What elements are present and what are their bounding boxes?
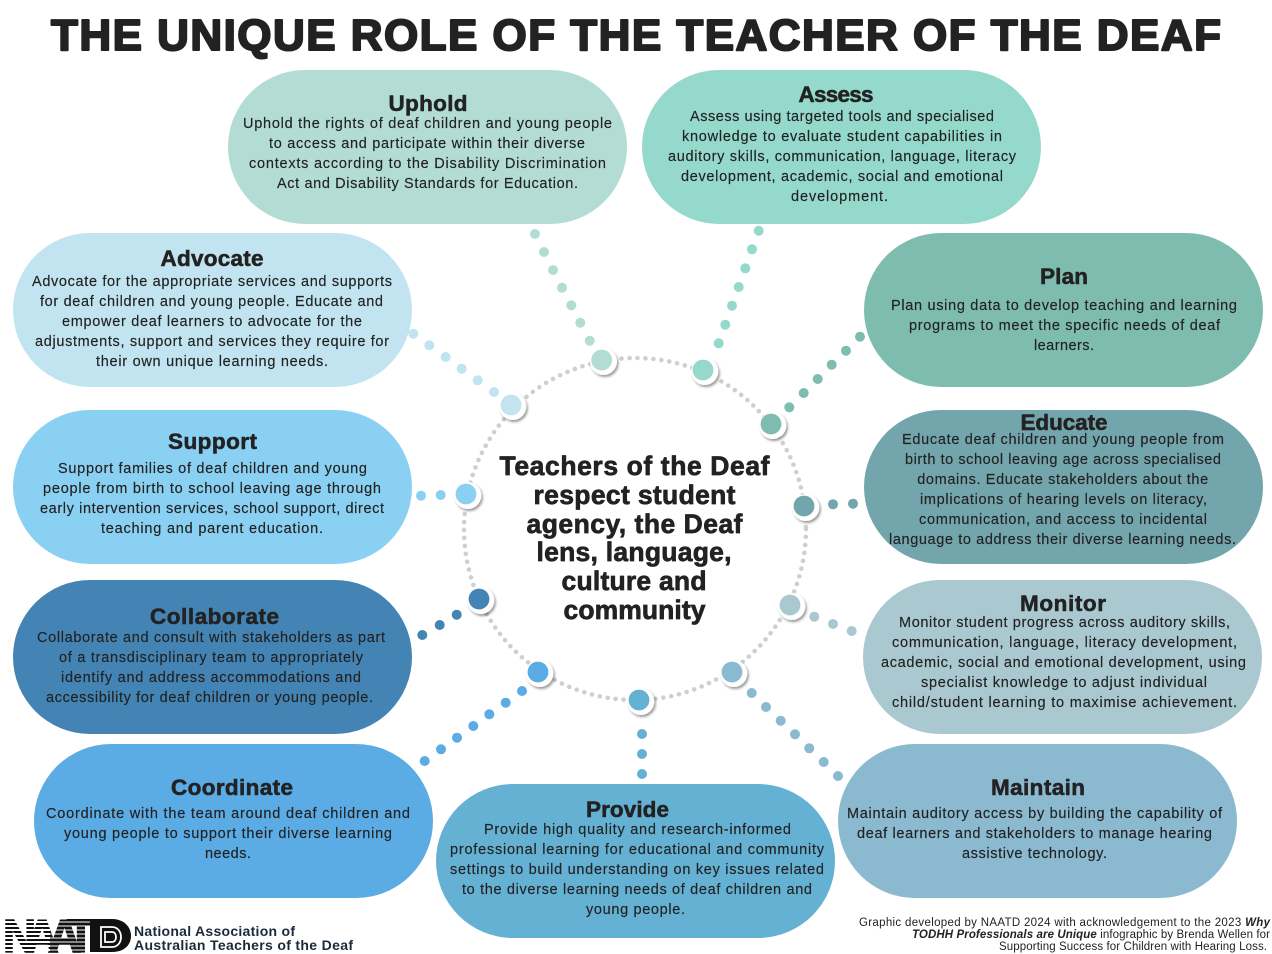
body: Support: teaching and parent education. xyxy=(101,521,323,537)
connector dots: Assess xyxy=(714,226,764,348)
organisation name: Australian Teachers of the Deaf xyxy=(134,937,353,953)
heading: Plan: Plan xyxy=(1040,264,1088,289)
connector dots: Provide xyxy=(637,729,647,779)
body: Uphold xyxy=(243,116,612,192)
heading: Provide: Provide xyxy=(586,797,669,822)
body: Maintain xyxy=(847,806,1223,862)
body: Assess: development, academic, social and emotional xyxy=(681,169,1003,185)
organisation name: National Association of xyxy=(134,923,295,939)
node: Monitor xyxy=(778,593,805,620)
body: Coordinate xyxy=(46,806,410,862)
connector dots: Educate xyxy=(828,499,858,509)
body: Coordinate: young people to support their diverse learning xyxy=(64,826,392,842)
body: Collaborate: accessibility for deaf children or young people. xyxy=(46,690,373,706)
attribution note: Graphic developed by NAATD 2024 with acknowledgement to the 2023 Why xyxy=(859,917,1271,929)
node: Advocate xyxy=(499,393,526,420)
body: Provide: to the diverse learning needs of deaf children and xyxy=(462,882,812,898)
body: Collaborate: identify and address accommodations and xyxy=(61,670,361,686)
title: THE UNIQUE ROLE OF THE TEACHER OF THE DEAF xyxy=(51,11,1221,60)
attribution note: Supporting Success for Children with Hearing Loss. xyxy=(999,941,1267,953)
connector dots: Collaborate xyxy=(417,610,462,640)
body: Plan xyxy=(891,298,1237,354)
body: Assess: knowledge to evaluate student capabilities in xyxy=(682,129,1002,145)
body: Plan: programs to meet the specific needs of deaf xyxy=(909,318,1221,334)
heading: Maintain: Maintain xyxy=(991,775,1085,800)
body: Maintain: deaf learners and stakeholders to manage hearing xyxy=(857,826,1212,842)
body: Advocate: their own unique learning needs. xyxy=(96,354,328,370)
body: Provide: Provide high quality and research-informed xyxy=(484,822,791,838)
body: Provide: professional learning for educational and community xyxy=(450,842,825,858)
panel: Coordinate xyxy=(34,744,433,898)
panel: Advocate xyxy=(13,233,412,387)
body: Advocate: for deaf children and young people. Educate and xyxy=(40,294,383,310)
body: Support xyxy=(40,461,384,537)
node: Uphold xyxy=(590,348,617,375)
heading: Support: Support xyxy=(168,429,258,454)
body: Uphold: Uphold the rights of deaf children and young people xyxy=(243,116,612,132)
node: Support xyxy=(454,482,481,509)
body: Maintain: assistive technology. xyxy=(962,846,1107,862)
panel: Assess xyxy=(642,70,1041,224)
body: Monitor: child/student learning to maximise achievement. xyxy=(892,695,1237,711)
centre statement: agency, the Deaf xyxy=(526,509,743,539)
attribution note: TODHH Professionals are Unique infographic by Brenda Wellen for xyxy=(912,929,1270,941)
connector dots: Support xyxy=(416,490,446,501)
body: Assess xyxy=(668,109,1017,205)
body: Advocate xyxy=(32,274,392,370)
node: Collaborate xyxy=(467,587,494,614)
panel: Maintain xyxy=(838,744,1237,898)
node: Plan xyxy=(759,412,786,439)
body: Plan: learners. xyxy=(1034,338,1094,354)
node: Maintain xyxy=(720,660,747,687)
panel: Support xyxy=(13,410,412,564)
body: Maintain: Maintain auditory access by building the capability of xyxy=(847,806,1223,822)
node: Coordinate xyxy=(526,660,553,687)
heading: Coordinate: Coordinate xyxy=(171,775,293,800)
body: Plan: Plan using data to develop teaching and learning xyxy=(891,298,1237,314)
panel: Plan xyxy=(864,233,1263,387)
centre statement: community xyxy=(564,595,706,625)
body: Support: Support families of deaf children and young xyxy=(58,461,367,477)
connector dots: Advocate xyxy=(408,329,499,397)
body: Monitor: Monitor student progress across auditory skills, xyxy=(899,615,1230,631)
body: Educate xyxy=(889,432,1236,548)
body: Support: people from birth to school leaving age through xyxy=(43,481,381,497)
body: Coordinate: needs. xyxy=(205,846,251,862)
heading: Advocate: Advocate xyxy=(160,246,264,271)
panel: Provide xyxy=(436,784,835,938)
centre statement: Teachers of the Deaf xyxy=(500,451,770,481)
dotted ring around centre xyxy=(464,358,806,700)
body: Advocate: adjustments, support and services they require for xyxy=(35,334,389,350)
connector dots: Maintain xyxy=(747,688,843,781)
body: Educate: Educate deaf children and young people from xyxy=(902,432,1224,448)
body: Monitor xyxy=(881,615,1246,711)
body: Monitor: academic, social and emotional development, using xyxy=(881,655,1246,671)
body: Monitor: communication, language, literacy development, xyxy=(892,635,1237,651)
connector dots: Uphold xyxy=(530,229,595,346)
attribution note xyxy=(859,917,1271,953)
centre statement xyxy=(500,451,770,625)
body: Collaborate: of a transdisciplinary team to appropriately xyxy=(59,650,364,666)
centre statement: lens, language, xyxy=(536,537,732,567)
body: Uphold: contexts according to the Disability Discrimination xyxy=(249,156,606,172)
connector dots: Monitor xyxy=(809,612,857,636)
body: Educate: domains. Educate stakeholders about the xyxy=(917,472,1208,488)
connector dots: Coordinate xyxy=(420,686,527,766)
connector dots: Plan xyxy=(784,332,865,412)
node: Educate xyxy=(792,494,819,521)
panel: Collaborate xyxy=(13,580,412,734)
body: Advocate: Advocate for the appropriate services and supports xyxy=(32,274,392,290)
panel: Uphold xyxy=(228,70,627,224)
body: Assess: auditory skills, communication, language, literacy xyxy=(668,149,1017,165)
body: Educate: language to address their diverse learning needs. xyxy=(889,532,1236,548)
centre statement: culture and xyxy=(562,566,706,596)
panel: Educate xyxy=(864,410,1263,564)
body: Educate: implications of hearing levels on literacy, xyxy=(920,492,1207,508)
body: Educate: birth to school leaving age across specialised xyxy=(905,452,1221,468)
body: Monitor: specialist knowledge to adjust individual xyxy=(921,675,1207,691)
body: Provide: young people. xyxy=(586,902,685,918)
node: Assess xyxy=(691,358,718,385)
body: Provide xyxy=(450,822,825,918)
heading: Uphold: Uphold xyxy=(388,91,468,116)
organisation name xyxy=(134,923,353,953)
body: Collaborate: Collaborate and consult with stakeholders as part xyxy=(37,630,385,646)
centre statement: respect student xyxy=(534,480,736,510)
body: Advocate: empower deaf learners to advocate for the xyxy=(62,314,362,330)
body: Educate: communication, and access to incidental xyxy=(919,512,1207,528)
body: Provide: settings to build understanding on key issues related xyxy=(450,862,824,878)
heading: Monitor: Monitor xyxy=(1020,591,1106,616)
body: Assess: development. xyxy=(791,189,888,205)
heading: Collaborate: Collaborate xyxy=(150,604,279,629)
body: Uphold: to access and participate within their diverse xyxy=(269,136,585,152)
body: Collaborate xyxy=(37,630,385,706)
body: Assess: Assess using targeted tools and specialised xyxy=(690,109,994,125)
heading: Educate: Educate xyxy=(1020,410,1108,435)
body: Support: early intervention services, school support, direct xyxy=(40,501,384,517)
node: Provide xyxy=(627,688,654,715)
heading: Assess: Assess xyxy=(798,82,874,107)
panel: Monitor xyxy=(863,580,1262,734)
body: Uphold: Act and Disability Standards for Education. xyxy=(277,176,578,192)
body: Coordinate: Coordinate with the team around deaf children and xyxy=(46,806,410,822)
